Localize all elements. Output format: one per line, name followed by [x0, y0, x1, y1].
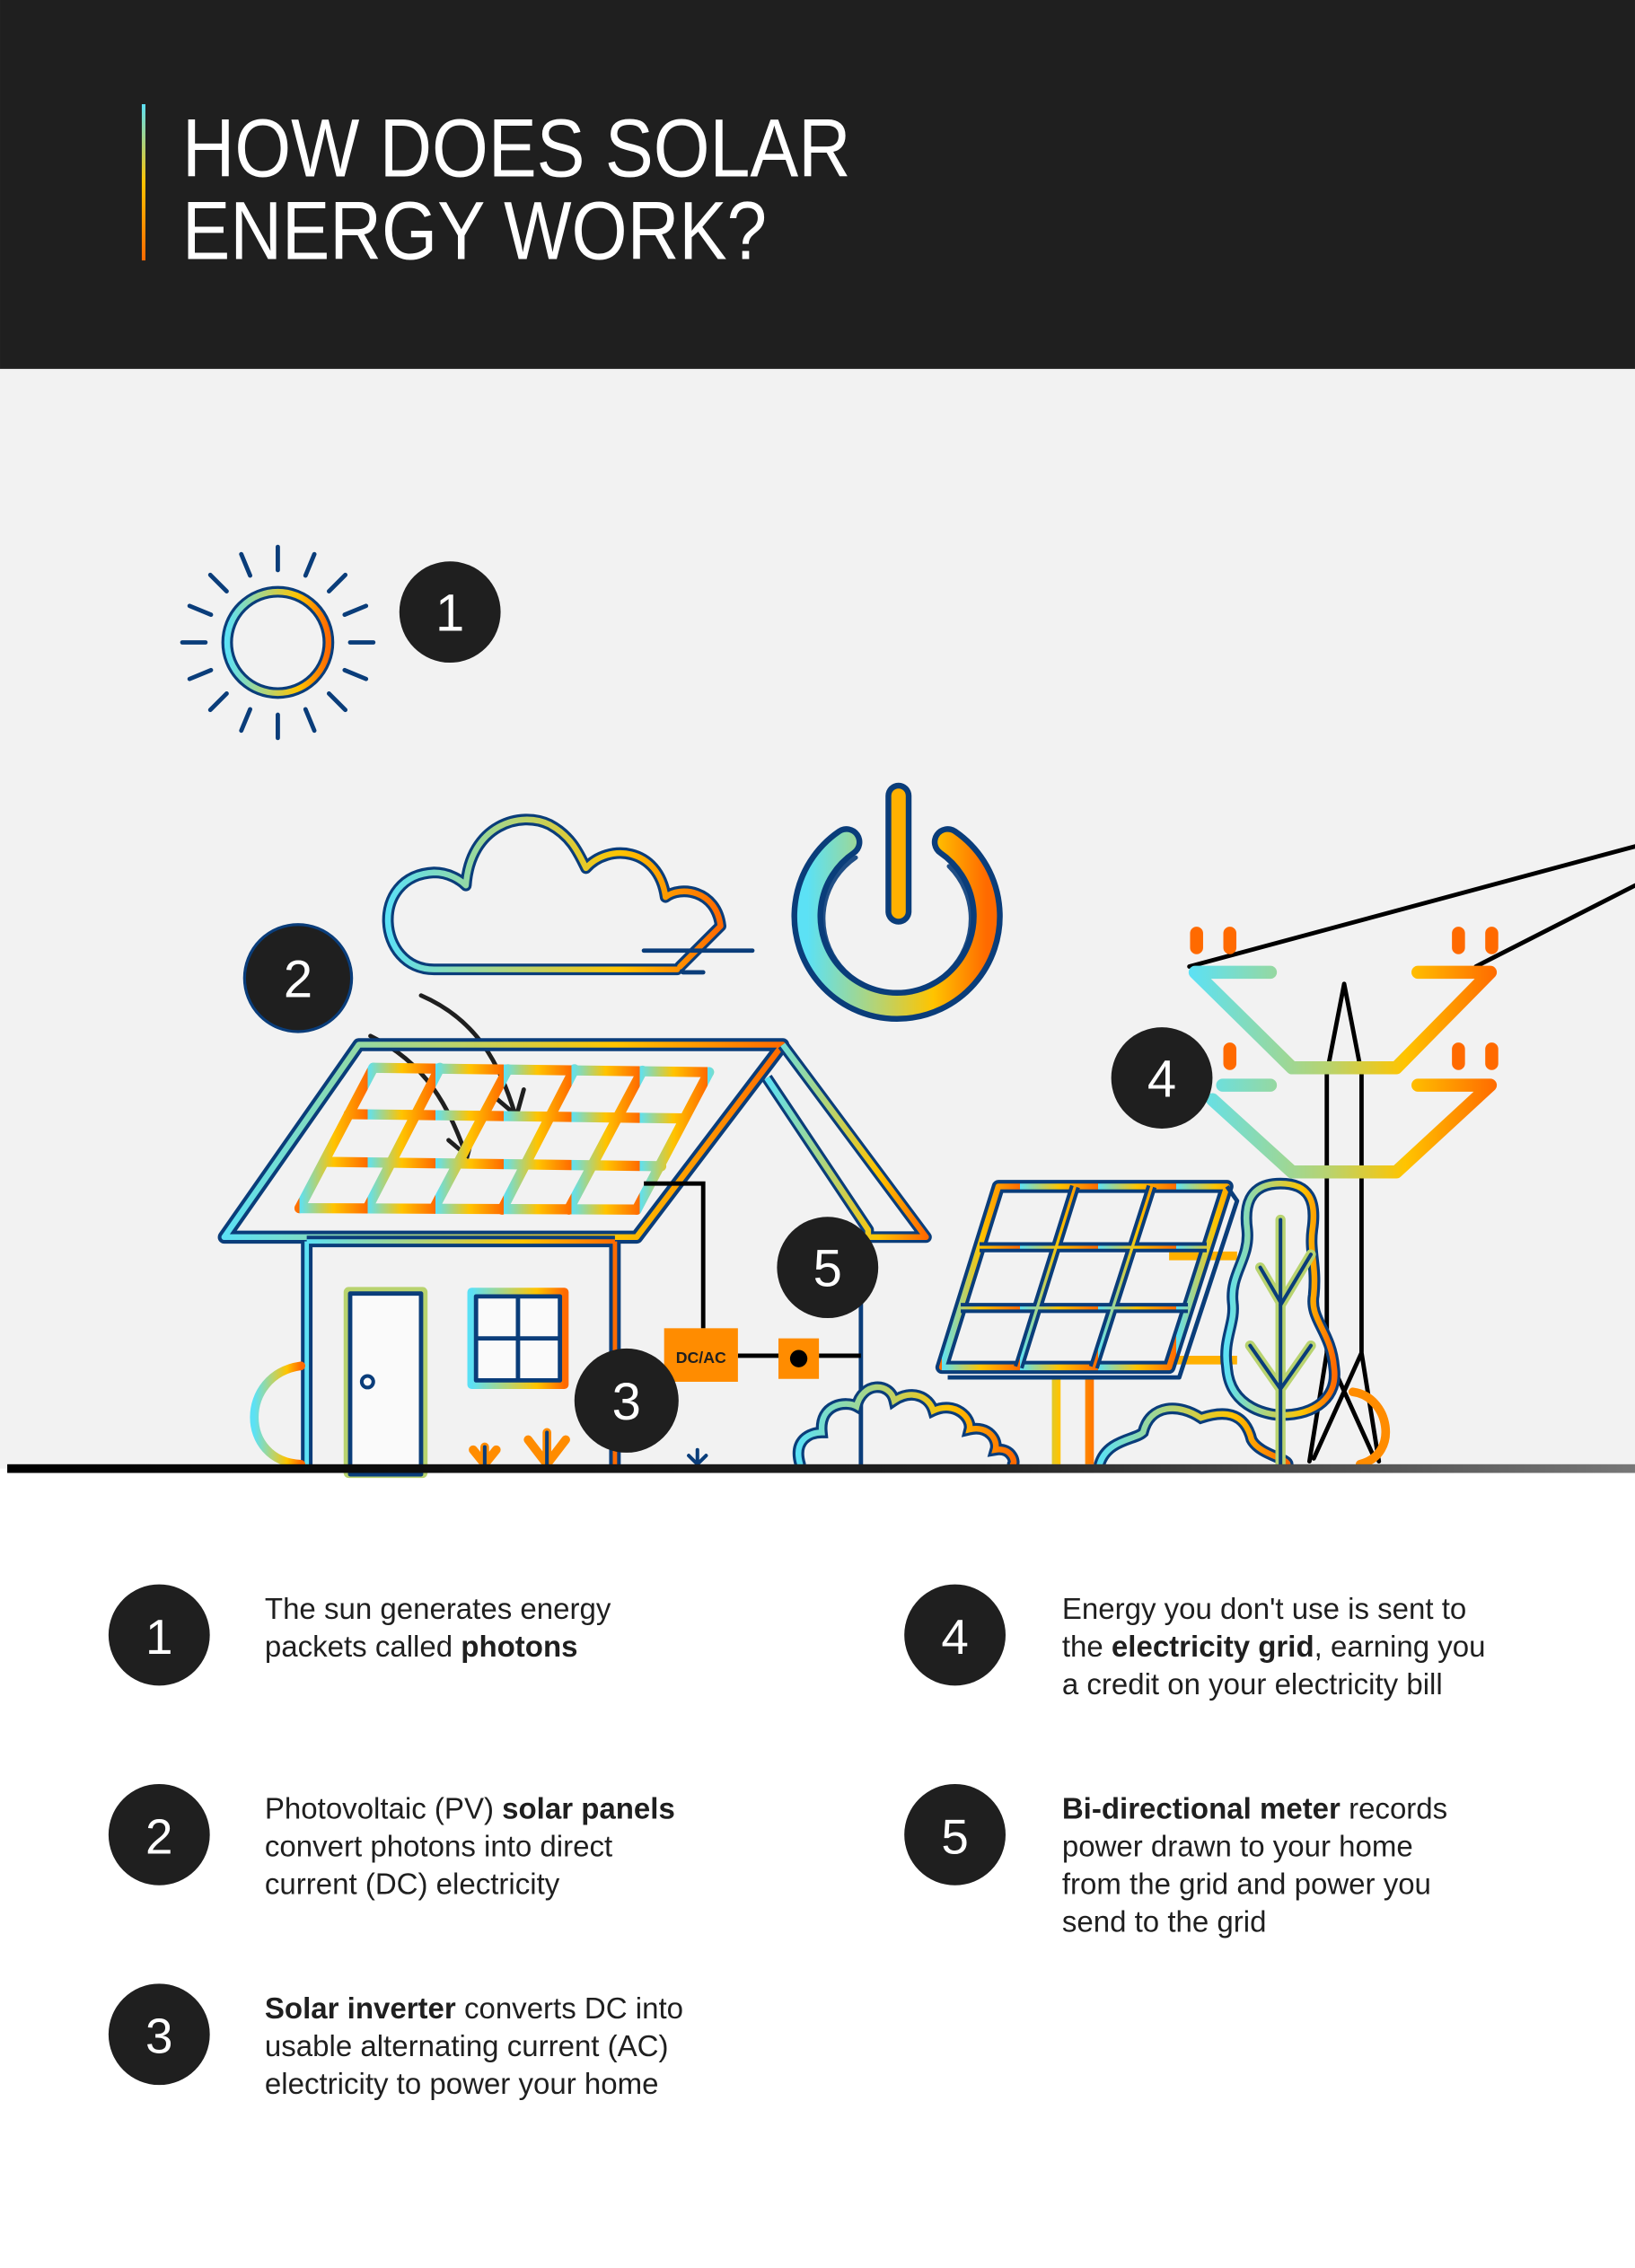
roof solar panels: [300, 1068, 709, 1209]
legend item 4: [904, 1585, 1486, 1701]
arrows: photons to panels: [371, 996, 523, 1156]
icon: power button: [793, 796, 1001, 1024]
walls: [307, 1237, 861, 1469]
house: [224, 1044, 926, 1474]
legend item 4: a credit on your electricity bill: [1062, 1667, 1443, 1701]
legend item 4: 4: [941, 1609, 969, 1665]
legend item 4: Energy you don't use is sent to: [1062, 1592, 1466, 1625]
step badge 4: 4: [1147, 1050, 1176, 1109]
legend item 4: the electricity grid, earning you: [1062, 1630, 1486, 1663]
legend item 1: The sun generates energy: [265, 1592, 611, 1625]
step badge 1: 1: [435, 585, 464, 643]
window: [471, 1292, 564, 1385]
icon: sun: [182, 547, 374, 738]
legend item 2: Photovoltaic (PV) solar panels: [265, 1792, 675, 1825]
legend item 5: power drawn to your home: [1062, 1830, 1413, 1863]
icon: cloud: [388, 820, 752, 972]
title: ENERGY WORK?: [182, 185, 767, 277]
ground line: [7, 1464, 1635, 1472]
meter box: [778, 1339, 819, 1379]
legend item 3: 3: [145, 2009, 173, 2064]
step badge 1: [400, 561, 501, 663]
step badge 5: 5: [813, 1240, 842, 1298]
power pylon: [1190, 847, 1635, 1462]
accent line: [142, 104, 145, 260]
gable: [767, 1044, 926, 1237]
legend item 5: [904, 1784, 1447, 1938]
step badge 2: 2: [284, 950, 312, 1008]
step badge 3: 3: [612, 1373, 641, 1431]
legend item 2: current (DC) electricity: [265, 1867, 560, 1900]
legend item 1: packets called photons: [265, 1630, 578, 1663]
tower: [1309, 984, 1379, 1462]
legend item 5: send to the grid: [1062, 1904, 1266, 1938]
wiring to inverter and meter: [644, 1183, 861, 1356]
standalone solar panel: [942, 1186, 1237, 1464]
legend item 2: [109, 1784, 675, 1900]
wires: [1190, 847, 1635, 966]
legend item 5: Bi-directional meter records: [1062, 1792, 1447, 1825]
step badge 2: [244, 925, 352, 1032]
step badge 5: [777, 1217, 878, 1318]
title: HOW DOES SOLAR: [182, 103, 851, 195]
crossarms: [1195, 972, 1490, 1172]
legend item 1: 1: [145, 1609, 173, 1665]
insulators: [1197, 933, 1491, 1063]
legend item 1: [109, 1585, 611, 1685]
legend item 2: convert photons into direct: [265, 1830, 612, 1863]
step badge 4: [1112, 1027, 1212, 1129]
inverter box DC/AC: DC/AC: [676, 1349, 726, 1367]
inverter box DC/AC: [664, 1328, 738, 1382]
legend: [109, 1585, 1486, 2100]
legend item 3: [109, 1983, 683, 2100]
legend item 5: 5: [941, 1808, 969, 1864]
step badge 3: [575, 1349, 679, 1453]
legend item 2: 2: [145, 1808, 173, 1864]
legend item 3: Solar inverter converts DC into: [265, 1991, 683, 2025]
illustration background: [0, 369, 1635, 1469]
legend item 3: electricity to power your home: [265, 2067, 658, 2100]
legend item 5: from the grid and power you: [1062, 1867, 1431, 1900]
plants and bushes: [254, 1366, 1014, 1464]
tree and bushes near pylon: [1100, 1183, 1385, 1464]
roof: [224, 1044, 783, 1237]
legend item 3: usable alternating current (AC): [265, 2029, 669, 2062]
door: [348, 1292, 423, 1474]
header band: [0, 0, 1635, 369]
title: [182, 103, 851, 277]
